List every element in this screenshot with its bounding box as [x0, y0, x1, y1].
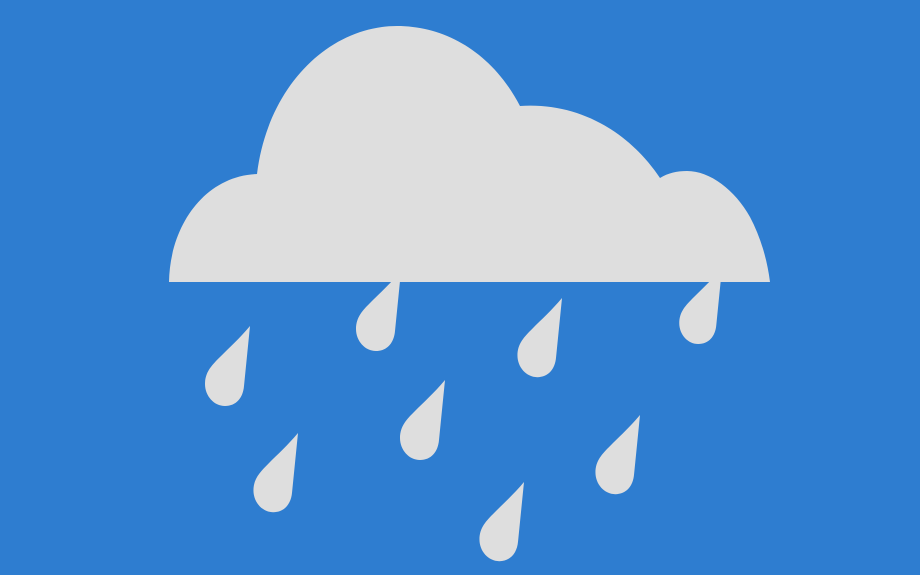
raindrop 5: [400, 380, 445, 460]
raindrop 1: [356, 271, 401, 351]
icon: raindrops: [205, 268, 722, 561]
raindrop 8: [479, 482, 524, 561]
icon: cloud: [169, 26, 770, 282]
raindrop 2: [679, 268, 722, 344]
raindrop 3: [517, 298, 562, 377]
raindrop 6: [595, 415, 640, 494]
raindrop 7: [253, 433, 298, 512]
raindrop 4: [205, 326, 250, 406]
